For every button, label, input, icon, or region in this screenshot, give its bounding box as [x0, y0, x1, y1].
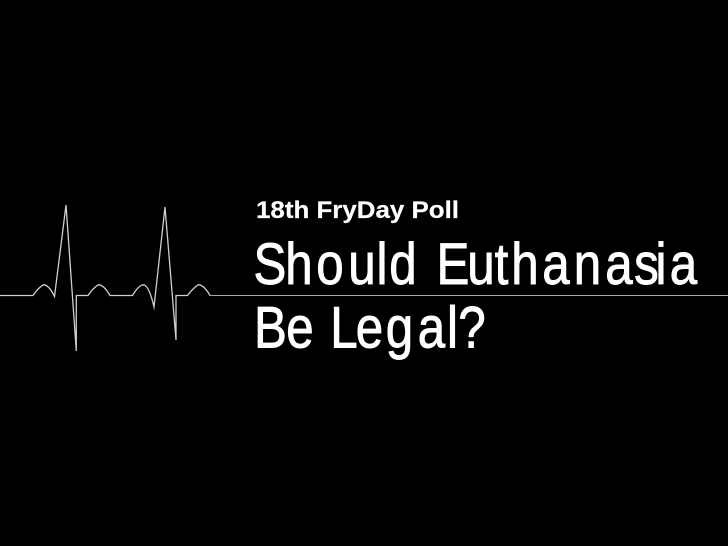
title: Should Euthanasia [254, 232, 697, 297]
icon: heartbeat ECG line [0, 205, 728, 351]
title: Be Legal? [254, 296, 486, 360]
subtitle: 18th FryDay Poll [256, 197, 459, 224]
title [254, 232, 697, 360]
